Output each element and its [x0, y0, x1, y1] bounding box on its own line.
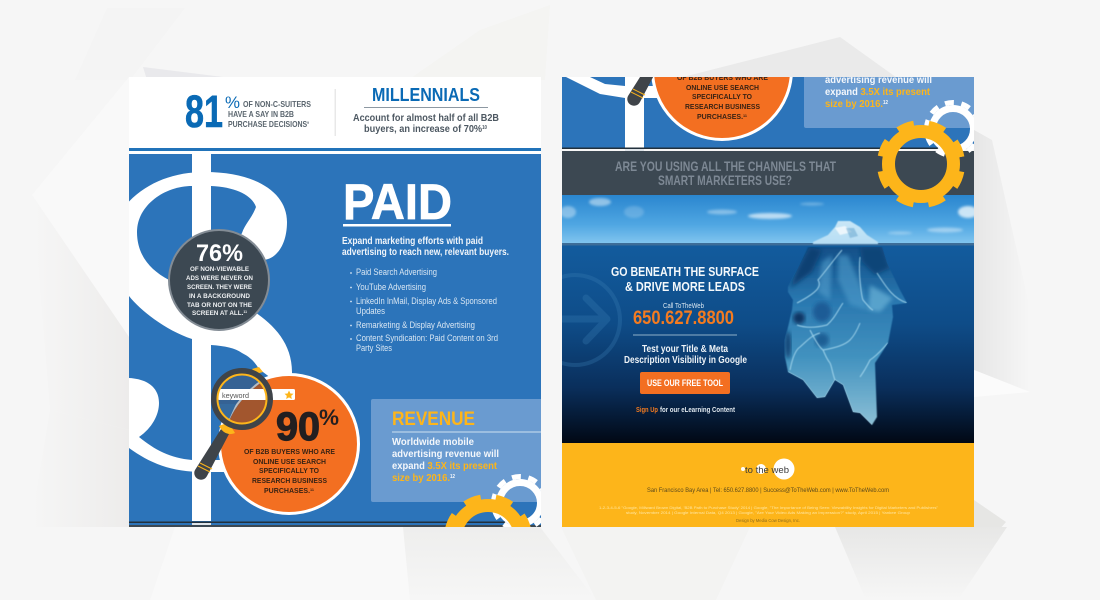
button: use our free tool: USE OUR FREE TOOL: [647, 378, 723, 389]
list: paid channels: LinkedIn InMail, Display Ads & Sponsored: [356, 296, 497, 306]
text block: paid intro: Expand marketing efforts with paid: [342, 235, 483, 247]
callout: 90 percent: OF B2B BUYERS WHO ARE: [244, 447, 335, 456]
callout: revenue continuation: [804, 77, 974, 128]
dollar sign continuation: [566, 77, 660, 148]
image: iceberg: [785, 221, 907, 425]
callout: 90 percent continuation: RESEARCH BUSINESS: [685, 102, 760, 111]
link: sign up: for our eLearning Content: [660, 407, 736, 414]
icon: dollar sign: [129, 154, 292, 521]
icon: white gear: [926, 102, 980, 156]
banner: channels question: SMART MARKETERS USE?: [658, 172, 792, 188]
panel: paid section: [129, 154, 541, 527]
footnotes: study, November 2014 | Google Internal Data, Q4 2013 | Google, "Are Your Video Ads Making an Impression?" study, April 2015 | Yankee Group: [626, 511, 910, 515]
list: paid channels: [350, 267, 498, 353]
callout: 90 percent: SPECIFICALLY TO: [259, 466, 319, 475]
list: paid channels: Remarketing & Display Advertising: [356, 320, 475, 330]
stat: millennials: 10: [482, 125, 487, 131]
callout: 90 percent continuation: ONLINE USE SEARCH: [686, 83, 759, 92]
callout: revenue: 12: [450, 474, 455, 480]
callout: 90 percent continuation: OF B2B BUYERS WHO ARE: [677, 73, 768, 82]
callout: 76 percent: SCREEN. THEY WERE: [187, 284, 253, 291]
stat: millennials: [353, 85, 499, 135]
stat: 81 percent: 81: [185, 86, 223, 137]
contact: phone number: 650.627.8800: [633, 308, 734, 329]
stat: 81 percent: HAVE A SAY IN B2B: [228, 109, 294, 119]
button: use our free tool: [640, 372, 730, 394]
link: sign up: [636, 407, 736, 414]
callout: revenue continuation: 12: [883, 100, 888, 106]
stat: millennials: buyers, an increase of 70%: [364, 123, 499, 135]
callout: revenue: REVENUE: [392, 408, 475, 430]
footnotes: [599, 506, 939, 515]
list: paid channels: Paid Search Advertising: [356, 267, 437, 277]
callout: 90 percent continuation: PURCHASES.: [697, 112, 746, 121]
callout: 76 percent: IN A BACKGROUND: [189, 293, 250, 300]
callout: 90 percent: ONLINE USE SEARCH: [253, 457, 326, 466]
stat: 81 percent: OF NON-C-SUITERS: [243, 99, 311, 109]
callout: 76 percent: SCREEN AT ALL.: [192, 310, 245, 317]
credit: Design by Media Cow Design, Inc.: [736, 518, 800, 523]
search bar: keyword: keyword: [222, 391, 249, 400]
callout: 76 percent: 11: [243, 310, 247, 314]
callout: 90 percent continuation: SPECIFICALLY TO: [692, 92, 752, 101]
text block: paid intro: advertising to reach new, relevant buyers.: [342, 246, 509, 258]
logo: to the web: to the web: [745, 465, 789, 476]
stat: 81 percent: 9: [307, 120, 310, 125]
callout: 76 percent: OF NON-VIEWABLE: [190, 266, 250, 273]
panel: left infographic page: [129, 77, 541, 527]
callout: 76 percent: ADS WERE NEVER ON: [186, 275, 253, 282]
callout: revenue: expand 3.5X its present: [392, 460, 497, 472]
logo: to the web: [741, 458, 794, 480]
callout: 90 percent continuation: [652, 77, 793, 141]
list: paid channels: Updates: [356, 306, 385, 316]
heading: go beneath the surface: & DRIVE MORE LEADS: [625, 279, 745, 294]
stat: millennials: Account for almost half of all B2B: [353, 112, 499, 124]
heading: PAID: PAID: [343, 174, 452, 230]
banner: channels question: [562, 148, 974, 195]
callout: 76 percent: TAB OR NOT ON THE: [187, 302, 253, 309]
callout: 90 percent: RESEARCH BUSINESS: [252, 476, 327, 485]
stat: 81 percent: [186, 94, 311, 128]
stat: millennials: MILLENNIALS: [372, 85, 480, 105]
text block: test your title: [624, 344, 747, 365]
icon: magnifier handle: [627, 77, 653, 106]
callout: revenue: [371, 399, 551, 502]
image: underwater: [562, 243, 974, 443]
text block: paid intro: [342, 236, 508, 257]
callout: 76 percent: [169, 230, 269, 330]
panel: right infographic page: [562, 77, 974, 527]
callout: revenue continuation: advertising revenue will: [825, 74, 932, 86]
contact: phone number: Call ToTheWeb: [663, 303, 704, 310]
link: sign up: Sign Up: [636, 407, 658, 414]
stat: 81 percent: PURCHASE DECISIONS: [228, 119, 325, 129]
list: paid channels: Party Sites: [356, 343, 392, 353]
heading: go beneath the surface: GO BENEATH THE SURFACE: [611, 264, 759, 279]
contact line: San Francisco Bay Area | Tel: 650.627.8800 | Success@ToTheWeb.com | www.ToTheWeb.com: [647, 487, 889, 494]
heading: go beneath the surface: [611, 267, 759, 291]
callout: 76 percent: 76%: [196, 240, 243, 267]
image: sky: [560, 195, 978, 244]
list: paid channels: YouTube Advertising: [356, 282, 426, 292]
icon: yellow gear: [445, 494, 531, 527]
icon: white gear: [494, 476, 546, 530]
callout: revenue: advertising revenue will: [392, 448, 499, 460]
panel: yellow footer: [562, 443, 974, 527]
contact: phone number: [633, 303, 737, 336]
list: paid channels: Content Syndication: Paid Content on 3rd: [356, 333, 498, 343]
callout: 90 percent continuation: 11: [743, 113, 748, 118]
text block: test your title: Description Visibility in Google: [624, 354, 747, 366]
callout: 90 percent: 11: [310, 487, 315, 492]
banner: channels question: ARE YOU USING ALL THE CHANNELS THAT: [615, 158, 836, 174]
callout: 90 percent: [220, 374, 358, 514]
callout: revenue continuation: expand 3.5X its present: [825, 86, 930, 98]
icon: yellow gear: [880, 123, 962, 205]
callout: revenue: Worldwide mobile: [392, 436, 474, 448]
callout: 90 percent: %: [319, 405, 339, 430]
search bar: keyword: [222, 390, 294, 400]
callout: revenue continuation: size by 2016.: [825, 98, 889, 110]
callout: revenue: size by 2016.: [392, 472, 456, 484]
icon: faint arrow circle: [562, 273, 622, 367]
callout: 90 percent: PURCHASES.: [264, 486, 313, 495]
stat: 81 percent: %: [225, 93, 240, 112]
text block: test your title: Test your Title & Meta: [642, 343, 728, 355]
icon: magnifying glass: [194, 367, 295, 480]
callout: 90 percent: 90: [276, 405, 320, 449]
footnotes: 1-2-3-4-5-6 "Google, Millward Brown Digital, 'B2B Path to Purchase Study' 2014 | Google, "The Importance of Being Seen: Viewability Insights for Digital Marketers and Publishers": [599, 506, 939, 510]
